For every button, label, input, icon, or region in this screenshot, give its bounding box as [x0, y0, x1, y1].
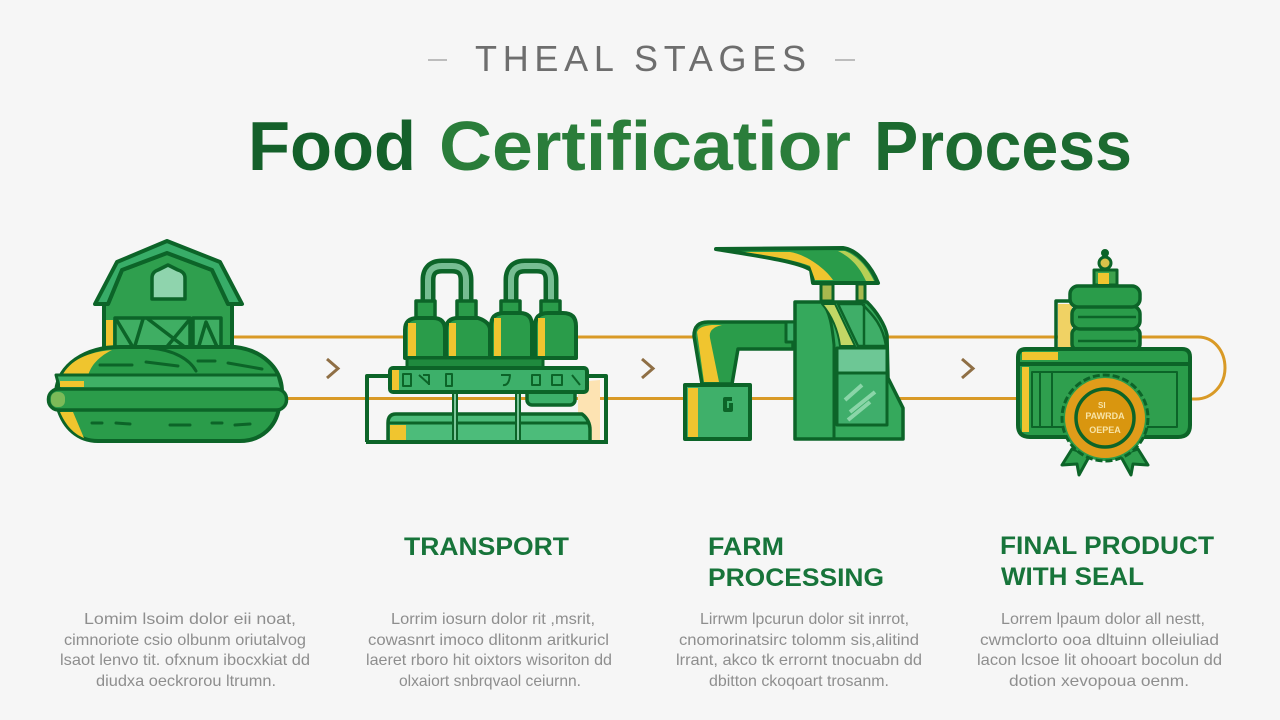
title: [248, 107, 1132, 185]
hopper: [716, 248, 878, 283]
barn doors: [115, 318, 221, 351]
subtitle: THEAL STAGES: [475, 38, 806, 79]
arm: [694, 322, 793, 384]
seal: SI: [1098, 401, 1106, 410]
title: Food: [248, 107, 416, 185]
text block: final product: dotion xevopoua oenm.: [1009, 673, 1189, 690]
heading: farm processing: [708, 533, 884, 592]
text block: farm: Lomim lsoim dolor eii noat,: [84, 611, 296, 628]
melon middle bands: [56, 375, 282, 390]
text block: transport: cowasnrt imoco dlitonm aritkuricl: [368, 632, 609, 649]
bottle highlights: [408, 318, 545, 356]
text block: final product: cwmclorto ooa dltuinn olleiuliad: [980, 632, 1219, 649]
text block: transport: [366, 611, 612, 690]
text block: farm processing: Lirrwm lpcurun dolor sit inrrot,: [700, 611, 909, 628]
text block: final product: Lorrem lpaum dolor all nestt,: [1001, 611, 1205, 628]
text block: final product: lacon lcsoe lit ohooart bocolun dd: [977, 652, 1222, 669]
machine window: [837, 373, 887, 425]
heading: transport: TRANSPORT: [404, 533, 569, 561]
heading: final product with seal: [1000, 532, 1214, 591]
barn body: [104, 253, 232, 352]
bottles: [405, 313, 576, 358]
heading: farm processing: FARM: [708, 533, 784, 561]
text block: transport: laeret rboro hit oixtors wisoriton dd: [366, 652, 612, 669]
title: Process: [874, 107, 1132, 185]
machine frame: [367, 376, 606, 442]
seal: OEPEA: [1089, 425, 1121, 435]
title: Certificatior: [439, 107, 851, 185]
heading: final product with seal: FINAL PRODUCT: [1000, 532, 1214, 560]
arrow 1: [327, 359, 338, 378]
coils: [1070, 286, 1140, 350]
icon: processing machine: [685, 248, 903, 439]
melon lower: [58, 408, 279, 441]
text block: final product: [977, 611, 1222, 690]
icon: bottling machine: [366, 266, 608, 442]
heading: final product with seal: WITH SEAL: [1001, 563, 1144, 591]
icon: final product with seal: [1018, 250, 1190, 475]
machine body: [795, 302, 903, 439]
machine panel: [837, 348, 887, 373]
barn window: [152, 265, 185, 299]
ribbons: [1062, 449, 1148, 475]
text block: farm: lsaot lenvo tit. ofxnum ibocxkiat dd: [60, 652, 310, 669]
arrow 3: [962, 359, 973, 378]
seal: PAWRDA: [1085, 411, 1125, 421]
conveyor bar: [390, 368, 587, 392]
text block: farm: [60, 611, 310, 690]
bottle necks: [416, 301, 560, 319]
text block: farm processing: lrrant, akco tk errornt tnocuabn dd: [676, 652, 922, 669]
text block: farm processing: cnomorinatsirc tolomm sis,alitind: [679, 632, 919, 649]
stand: [388, 414, 590, 442]
seal: [1062, 375, 1148, 461]
text block: transport: olxaiort snbrqvaol ceiurnn.: [399, 673, 581, 690]
text block: farm: diudxa oeckrorou ltrumn.: [96, 673, 276, 690]
text block: farm: cimnoriote csio olbunm oriutalvog: [64, 632, 306, 649]
hopper posts: [821, 284, 865, 301]
tank: [1018, 349, 1190, 437]
text block: transport: Lorrim iosurn dolor rit ,msrit,: [391, 611, 595, 628]
barn roof: [95, 241, 242, 304]
gold connector line: [232, 337, 1225, 399]
melon top: [56, 347, 282, 392]
box: [685, 385, 750, 439]
cap: [1102, 250, 1108, 256]
bottle base: [407, 358, 543, 369]
text block: farm processing: dbitton ckoqoart trosanm.: [709, 673, 889, 690]
hanging tank: [527, 388, 575, 405]
text block: farm processing: [676, 611, 922, 690]
arrow 2: [642, 359, 653, 378]
pipes: [428, 266, 551, 302]
icon: barn on melon: [48, 241, 286, 441]
heading: farm processing: PROCESSING: [708, 564, 884, 592]
handle: [1056, 301, 1072, 348]
